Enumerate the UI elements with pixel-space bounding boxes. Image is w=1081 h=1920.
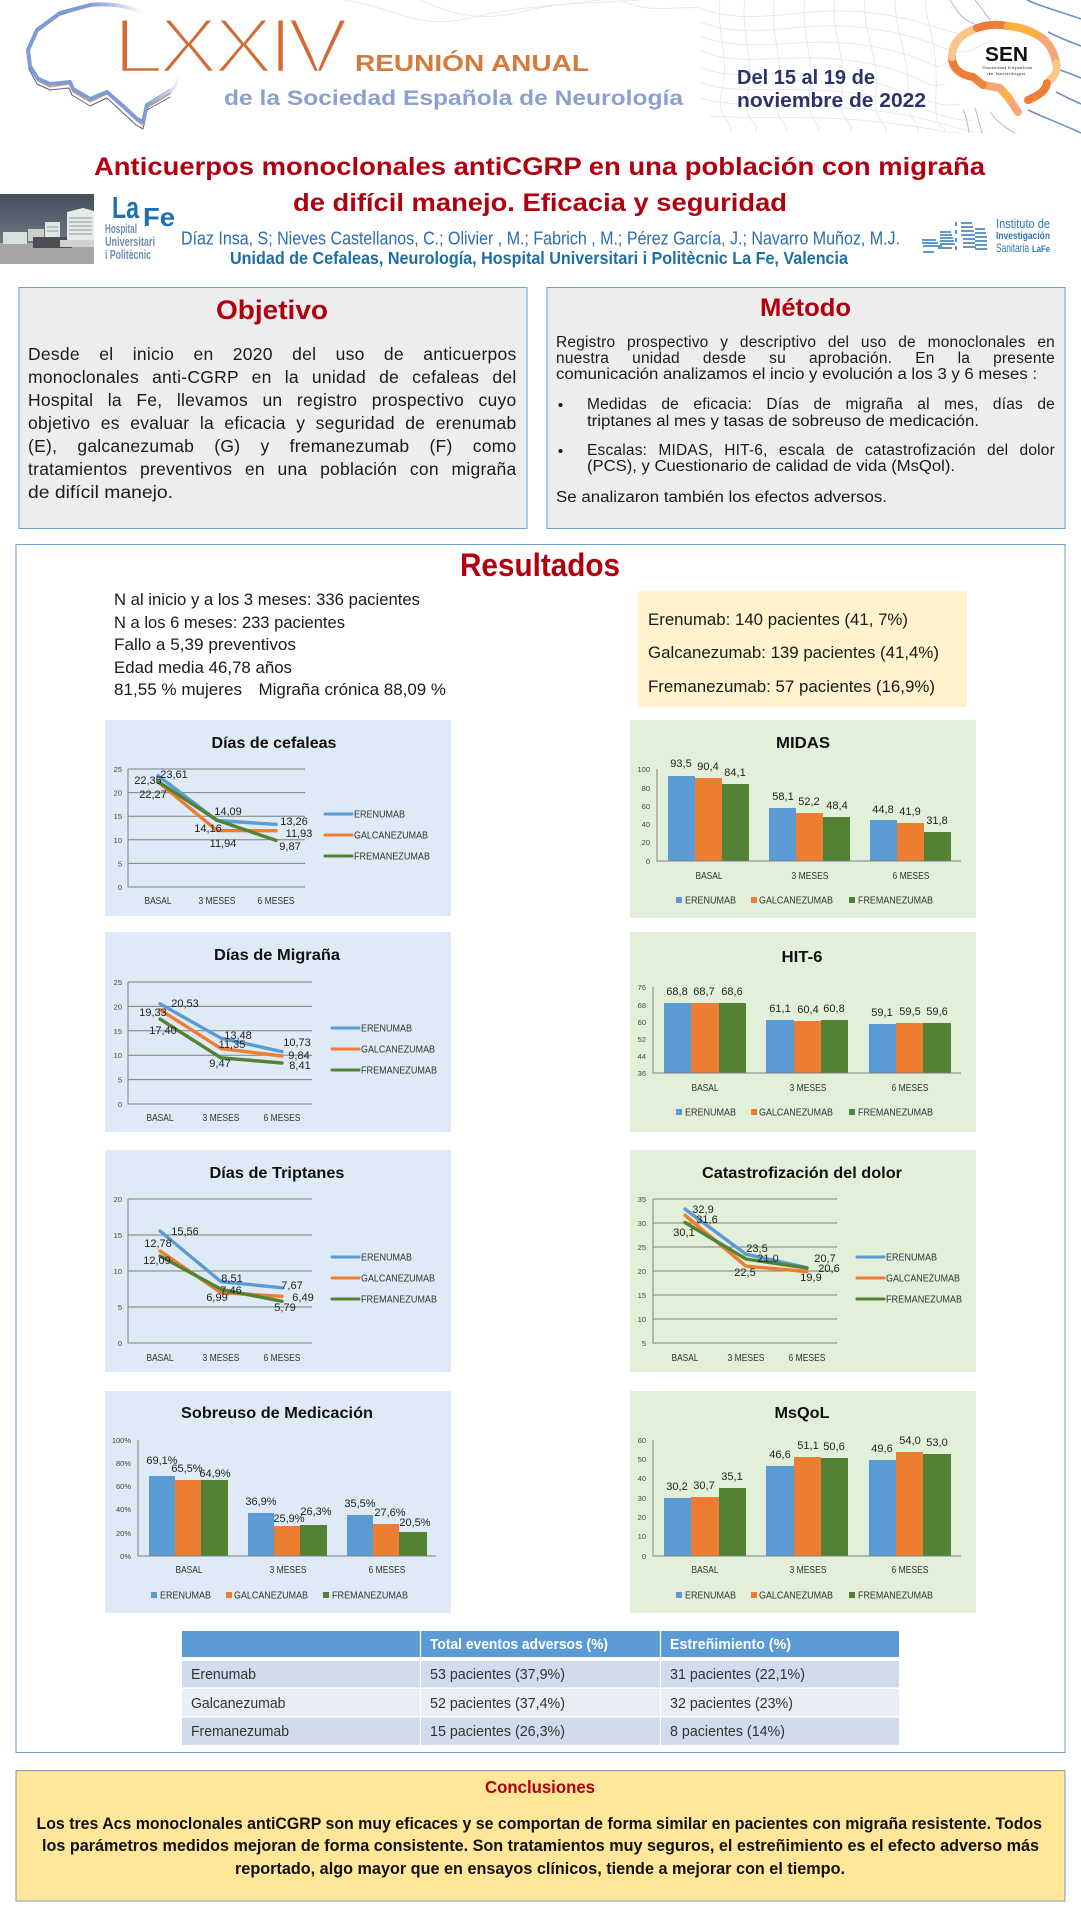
line chart: catastrofizacion del dolor: 22,5 (734, 1267, 756, 1279)
heading: Sociedad Espanola de Neurologia: de la Sociedad Española de Neurología (224, 87, 683, 110)
bar chart: MIDAS: 31,8 (926, 815, 948, 827)
bar chart: sobreuso de medicacion: 69,1% (146, 1455, 178, 1467)
table header: Total eventos adversos (%) (430, 1636, 608, 1653)
adverse effects note: Se analizaron también los efectos adversos. (556, 489, 887, 506)
legend: ERENUMAB (361, 1024, 412, 1034)
title: de difícil manejo. Eficacia y seguridad (293, 189, 787, 217)
legend (676, 1590, 933, 1602)
bar chart: MIDAS: 41,9 (899, 806, 921, 818)
line chart: dias de cefaleas: 5 (118, 859, 122, 868)
method intro (556, 335, 1055, 383)
bar chart: MsQoL: 30,2 (666, 1481, 688, 1493)
line chart: dias de cefaleas: 20 (114, 789, 122, 798)
line chart: catastrofizacion del dolor: 19,9 (800, 1272, 822, 1284)
panel: resultados (16, 544, 1065, 1752)
legend (332, 1024, 437, 1076)
bar chart: HIT-6: 6 MESES (892, 1083, 929, 1094)
legend: FREMANEZUMAB (858, 896, 933, 906)
line chart: dias de triptanes (105, 1150, 451, 1372)
row: Galcanezumab (191, 1695, 793, 1712)
logo: La Fe hospital: Hospital (105, 221, 137, 236)
row: Fremanezumab: 8 pacientes (14%) (670, 1723, 785, 1740)
line chart: dias de migrana: 15 (114, 1027, 122, 1036)
bar chart: MsQoL: 35,1 (721, 1471, 743, 1483)
bar chart: sobreuso de medicacion: 80% (116, 1459, 131, 1468)
conclusions text: reportado, algo mayor que en ensayos clínicos, tiende a mejorar con el tiempo. (235, 1859, 845, 1878)
conclusions text: los parámetros medidos mejoran de forma consistente. Son tratamientos muy seguros, el estreñimiento es el efecto adverso más (42, 1836, 1039, 1855)
legend: FREMANEZUMAB (886, 1294, 962, 1306)
bar chart: sobreuso de medicacion: 26,3% (300, 1506, 332, 1518)
bar chart: sobreuso de medicacion: 20% (116, 1529, 131, 1538)
line chart: dias de cefaleas: 13,26 (280, 816, 308, 828)
bar chart: HIT-6: 60 (638, 1018, 646, 1027)
row: Erenumab: Erenumab (191, 1666, 256, 1683)
bar chart: MIDAS: 6 MESES (892, 871, 930, 882)
header banner (27, 0, 1081, 133)
bar chart: sobreuso de medicacion: 60% (116, 1482, 131, 1491)
bar chart: MIDAS: 20 (642, 838, 650, 847)
line chart: dias de triptanes: 12,09 (143, 1255, 171, 1267)
bar chart: MsQoL: 51,1 (797, 1440, 819, 1452)
chart title: Días de Triptanes (210, 1165, 345, 1182)
line chart: catastrofizacion del dolor: 23,5 (746, 1243, 768, 1255)
bar chart: HIT-6: 76 (638, 983, 646, 992)
heading: Reunion Anual: REUNIÓN ANUAL (355, 49, 589, 76)
bar chart: HIT-6: 68,8 (666, 986, 688, 998)
bar chart: sobreuso de medicacion: 64,9% (199, 1468, 231, 1480)
row: Galcanezumab: Galcanezumab (191, 1695, 286, 1712)
bar chart: MIDAS: BASAL (696, 871, 723, 882)
bar chart: HIT-6: 44 (638, 1052, 646, 1061)
line chart: catastrofizacion del dolor: 20 (638, 1267, 646, 1276)
row: Galcanezumab: 52 pacientes (37,4%) (430, 1695, 565, 1712)
line chart: dias de triptanes: BASAL (146, 1353, 174, 1364)
line chart: dias de triptanes: 6 MESES (264, 1353, 301, 1364)
row: Fremanezumab: Fremanezumab (191, 1723, 289, 1740)
bar chart: MsQoL: 50 (638, 1455, 646, 1464)
method intro: nuestra unidad desde su aprobación. En la presente (556, 350, 1055, 367)
bar chart: MIDAS: 90,4 (697, 761, 719, 773)
legend: FREMANEZUMAB (858, 1590, 933, 1602)
line chart: dias de triptanes: 15,56 (171, 1226, 199, 1238)
legend: ERENUMAB (886, 1252, 937, 1264)
bar chart: sobreuso de medicacion: 0% (120, 1552, 131, 1561)
patient stats: 81,55 % mujeres (114, 681, 242, 699)
line chart: dias de migrana: 17,40 (149, 1025, 177, 1037)
patient stats (114, 591, 446, 699)
icon: brain outline (27, 4, 178, 129)
bar chart: sobreuso de medicacion: 36,9% (245, 1496, 277, 1508)
bar chart: MsQoL: 53,0 (926, 1437, 948, 1449)
bar chart: MIDAS (630, 720, 976, 918)
bar chart: sobreuso de medicacion: 65,5% (171, 1463, 203, 1475)
legend: FREMANEZUMAB (858, 1108, 933, 1118)
bar chart: HIT-6: 59,5 (899, 1006, 921, 1018)
legend (676, 1108, 933, 1118)
objective paragraph: Hospital la Fe, llevamos un registro prospectivo cuyo (28, 390, 516, 410)
row: Erenumab: 53 pacientes (37,9%) (430, 1666, 565, 1683)
line chart: dias de migrana: 10,73 (283, 1037, 311, 1049)
bar chart: MIDAS: 84,1 (724, 767, 746, 779)
legend: GALCANEZUMAB (886, 1274, 960, 1284)
objective paragraph: objetivo es evaluar la eficacia y seguridad de erenumab (28, 413, 516, 433)
bar chart: MIDAS: 3 MESES (792, 871, 829, 882)
bar chart: HIT-6: 59,6 (926, 1006, 948, 1018)
bar chart: MsQoL: 6 MESES (892, 1565, 929, 1576)
row: Fremanezumab (191, 1723, 785, 1740)
line chart: catastrofizacion del dolor: 32,9 (692, 1204, 714, 1216)
legend (325, 810, 430, 862)
bar chart: sobreuso de medicacion: 100% (112, 1436, 131, 1445)
line chart: dias de migrana: 20,53 (171, 998, 199, 1010)
bar chart: sobreuso de medicacion: 6 MESES (368, 1565, 406, 1576)
line chart: dias de cefaleas: 10 (114, 836, 122, 845)
line chart: dias de triptanes: 3 MESES (202, 1353, 240, 1364)
patient stats: Edad media 46,78 años (114, 659, 292, 677)
line chart: dias de cefaleas: 3 MESES (198, 896, 236, 907)
bar chart: MIDAS: 100 (637, 765, 650, 774)
heading: resultados: Resultados (460, 547, 620, 583)
bar chart: MsQoL: 10 (638, 1532, 646, 1541)
legend: ERENUMAB (361, 1252, 412, 1264)
event dates (737, 67, 926, 112)
bar chart: MsQoL: 30 (638, 1494, 646, 1503)
row: Fremanezumab: 15 pacientes (26,3%) (430, 1723, 565, 1740)
line chart: dias de migrana: 25 (114, 978, 122, 987)
method intro: comunicación analizamos el incio y evolución a los 3 y 6 meses : (556, 366, 1037, 383)
chart title: HIT-6 (782, 949, 823, 966)
bar chart: MsQoL: 0 (642, 1552, 646, 1561)
logo: La Fe hospital: i Politècnic (105, 247, 151, 262)
table header (430, 1636, 791, 1653)
line chart: catastrofizacion del dolor: 5 (642, 1339, 646, 1348)
legend: FREMANEZUMAB (354, 852, 430, 862)
line chart: dias de cefaleas: 9,87 (279, 841, 301, 853)
row: Galcanezumab: 32 pacientes (23%) (670, 1695, 793, 1712)
legend (857, 1252, 962, 1306)
bar chart: sobreuso de medicacion: 3 MESES (270, 1565, 307, 1576)
legend: ERENUMAB (160, 1590, 211, 1602)
patient stats: N a los 6 meses: 233 pacientes (114, 614, 345, 632)
logo: La Fe hospital: Universitari (105, 234, 155, 249)
event dates: Del 15 al 19 de (737, 67, 875, 89)
line chart: dias de cefaleas: 23,61 (160, 769, 188, 781)
banner wave background (345, 0, 1081, 133)
line chart: dias de triptanes: 7,46 (220, 1285, 242, 1297)
line chart: dias de triptanes: 12,78 (144, 1238, 172, 1250)
panel: objetivo (19, 288, 527, 528)
line chart: dias de migrana: 3 MESES (202, 1113, 240, 1124)
line chart: catastrofizacion del dolor: 35 (638, 1195, 646, 1204)
bar chart: MIDAS: 0 (646, 857, 650, 866)
bar chart: sobreuso de medicacion: 25,9% (273, 1513, 305, 1525)
bar chart: MIDAS: 60 (642, 802, 650, 811)
line chart: dias de migrana: 20 (114, 1002, 122, 1011)
line chart: catastrofizacion del dolor: 6 MESES (788, 1353, 826, 1364)
bar chart: MsQoL: 50,6 (823, 1441, 845, 1453)
chart title: MsQoL (774, 1405, 830, 1422)
conclusions text (36, 1814, 1042, 1878)
logo: SEN: de Neurología (987, 71, 1026, 76)
heading: objetivo: Objetivo (216, 295, 328, 325)
bar chart: MsQoL: BASAL (692, 1565, 719, 1576)
objective paragraph: monoclonales anti-CGRP en la unidad de cefaleas del (28, 367, 516, 387)
legend: GALCANEZUMAB (759, 1590, 833, 1602)
bar chart: sobreuso de medicacion: 40% (116, 1505, 131, 1514)
bar chart: sobreuso de medicacion: 20,5% (399, 1517, 431, 1529)
logo: Instituto de Investigacion Sanitaria: Investigación (996, 230, 1050, 242)
bar chart: HIT-6: 61,1 (769, 1003, 791, 1015)
line chart: dias de cefaleas: 6 MESES (258, 896, 295, 907)
line chart: dias de migrana: 9,84 (288, 1050, 310, 1062)
panel: metodo (547, 288, 1065, 528)
bar chart: MIDAS: 93,5 (670, 758, 692, 770)
bar chart: MIDAS: 80 (642, 784, 650, 793)
callout: patients per drug: Erenumab: 140 pacientes (41, 7%) (648, 611, 908, 629)
panel: conclusiones (16, 1770, 1065, 1901)
bar chart: MsQoL: 3 MESES (790, 1565, 827, 1576)
bar chart: MIDAS: 52,2 (798, 796, 820, 808)
bar chart: MIDAS: 44,8 (872, 804, 894, 816)
line chart: dias de cefaleas: 22,35 (134, 775, 162, 787)
line chart: catastrofizacion del dolor: 21,0 (757, 1253, 779, 1265)
chart title: Sobreuso de Medicación (181, 1405, 373, 1422)
line chart: dias de triptanes: 8,51 (221, 1273, 243, 1285)
line chart: dias de migrana: 9,47 (209, 1058, 231, 1070)
bar chart: MsQoL: 54,0 (899, 1435, 921, 1447)
bar chart: sobreuso de medicacion: 27,6% (374, 1507, 406, 1519)
legend: GALCANEZUMAB (354, 830, 428, 842)
line chart: dias de cefaleas: 14,16 (194, 823, 222, 835)
logo: Instituto de Investigacion Sanitaria: Sanitaria (996, 241, 1029, 255)
legend: ERENUMAB (685, 896, 736, 906)
line chart: dias de triptanes: 6,49 (292, 1292, 314, 1304)
line chart: dias de migrana: 6 MESES (264, 1113, 301, 1124)
authors: Díaz Insa, S; Nieves Castellanos, C.; Olivier , M.; Fabrich , M.; Pérez García, J.; Navarro Muñoz, M.J. (181, 228, 900, 248)
legend: GALCANEZUMAB (759, 896, 833, 906)
line chart: dias de cefaleas: BASAL (144, 896, 172, 907)
line chart: dias de cefaleas: 11,94 (210, 838, 236, 850)
logo: La Fe hospital: Fe (143, 202, 175, 232)
bar chart: MsQoL: 20 (638, 1513, 646, 1522)
line chart: dias de migrana: 10 (114, 1051, 122, 1060)
bar chart: MsQoL (630, 1391, 976, 1613)
line chart: dias de cefaleas: 14,09 (214, 806, 242, 818)
logo: SEN (952, 25, 1057, 112)
bullet: medidas de eficacia (558, 397, 1055, 430)
row: Erenumab: 31 pacientes (22,1%) (670, 1666, 805, 1683)
bar chart: MsQoL: 46,6 (769, 1449, 791, 1461)
bar chart: sobreuso de medicacion (105, 1391, 451, 1613)
callout: patients per drug (638, 591, 967, 707)
legend: GALCANEZUMAB (361, 1044, 435, 1056)
heading: metodo: Método (760, 294, 851, 322)
bar chart: HIT-6: 68 (638, 1001, 646, 1010)
affiliation: Unidad de Cefaleas, Neurología, Hospital Universitari i Politècnic La Fe, Valencia (230, 248, 848, 268)
line chart: catastrofizacion del dolor: 30,1 (673, 1227, 695, 1239)
table header: Estreñimiento (%) (670, 1636, 791, 1653)
logo: Instituto de Investigacion Sanitaria (922, 217, 1050, 255)
bar chart: MIDAS: 48,4 (826, 800, 848, 812)
hospital photo (0, 194, 94, 264)
legend (151, 1590, 408, 1602)
line chart: dias de migrana: 11,35 (219, 1039, 245, 1051)
legend: FREMANEZUMAB (361, 1066, 437, 1076)
line chart: dias de cefaleas: 11,93 (286, 828, 312, 840)
logo: La Fe hospital (105, 190, 175, 262)
line chart: dias de triptanes: 7,67 (281, 1280, 303, 1292)
bar chart: sobreuso de medicacion: 35,5% (344, 1498, 376, 1510)
callout: patients per drug: Galcanezumab: 139 pacientes (41,4%) (648, 644, 939, 662)
bar chart: MsQoL: 60 (638, 1436, 646, 1445)
bar chart: HIT-6: 68,7 (693, 986, 715, 998)
table: adverse events (182, 1631, 899, 1745)
bar chart: MIDAS: 40 (642, 820, 650, 829)
objective paragraph (28, 343, 516, 502)
line chart: dias de migrana: 0 (118, 1100, 122, 1109)
bar chart: sobreuso de medicacion: BASAL (176, 1565, 203, 1576)
line chart: dias de triptanes: 15 (114, 1231, 122, 1240)
objective paragraph: tratamientos preventivos en una población con migraña (28, 459, 516, 479)
bar chart: MsQoL: 40 (638, 1474, 646, 1483)
logo: Instituto de Investigacion Sanitaria: LaFe (1032, 244, 1050, 254)
line chart: dias de cefaleas: 22,27 (139, 789, 167, 801)
bar chart: HIT-6 (630, 932, 976, 1132)
callout: patients per drug: Fremanezumab: 57 pacientes (16,9%) (648, 678, 935, 696)
line chart: catastrofizacion del dolor: 10 (638, 1315, 646, 1324)
legend: GALCANEZUMAB (361, 1274, 435, 1284)
legend: ERENUMAB (685, 1590, 736, 1602)
logo: Instituto de Investigacion Sanitaria: Instituto de (996, 217, 1050, 231)
bar chart: MsQoL: 49,6 (871, 1443, 893, 1455)
patient stats: N al inicio y a los 3 meses: 336 pacientes (114, 591, 420, 609)
bar chart: HIT-6: BASAL (692, 1083, 719, 1094)
line chart: dias de migrana: BASAL (146, 1113, 174, 1124)
legend: FREMANEZUMAB (361, 1294, 437, 1306)
line chart: catastrofizacion del dolor (630, 1150, 976, 1372)
chart title: MIDAS (776, 735, 830, 752)
bar chart: HIT-6: 60,4 (797, 1004, 819, 1016)
line chart: dias de migrana: 19,33 (139, 1007, 167, 1019)
line chart: dias de cefaleas: 25 (114, 765, 122, 774)
chart title: Días de cefaleas (212, 735, 337, 752)
bar chart: HIT-6: 3 MESES (790, 1083, 827, 1094)
line chart: dias de migrana (105, 932, 451, 1132)
event dates: noviembre de 2022 (737, 90, 926, 112)
bar chart: MsQoL: 30,7 (693, 1480, 715, 1492)
title (94, 153, 986, 217)
conclusions text: Los tres Acs monoclonales antiCGRP son muy eficaces y se comportan de forma similar en pacientes con migraña resistente. Todos (36, 1814, 1042, 1833)
line chart: catastrofizacion del dolor: 30 (638, 1219, 646, 1228)
bar chart: HIT-6: 68,6 (721, 986, 743, 998)
legend (676, 896, 933, 906)
line chart: dias de migrana: 8,41 (289, 1060, 311, 1072)
legend: GALCANEZUMAB (234, 1590, 308, 1602)
bar chart: MIDAS: 58,1 (772, 791, 794, 803)
line chart: dias de triptanes: 5 (118, 1303, 122, 1312)
chart title: Catastrofización del dolor (702, 1165, 902, 1182)
objective paragraph: (E), galcanezumab (G) y fremanezumab (F) como (28, 436, 516, 456)
line chart: dias de triptanes: 6,99 (206, 1292, 228, 1304)
line chart: catastrofizacion del dolor: 25 (638, 1243, 646, 1252)
logo: La Fe hospital: La (112, 190, 140, 225)
line chart: catastrofizacion del dolor: 15 (638, 1291, 646, 1300)
event number LXXIV: LXXIV (113, 2, 349, 89)
bar chart: HIT-6: 60,8 (823, 1003, 845, 1015)
line chart: dias de migrana: 5 (118, 1076, 122, 1085)
legend: ERENUMAB (685, 1108, 736, 1118)
line chart: dias de cefaleas (105, 720, 451, 916)
bullet: medidas de eficacia: triptanes al mes y tasas de sobreuso de medicación. (587, 413, 979, 430)
row: Erenumab (191, 1666, 805, 1683)
line chart: dias de cefaleas: 15 (114, 812, 122, 821)
objective paragraph: de difícil manejo. (28, 482, 173, 502)
bar chart: HIT-6: 52 (638, 1035, 646, 1044)
line chart: catastrofizacion del dolor: 3 MESES (728, 1353, 765, 1364)
bullet: escalas (558, 443, 1055, 475)
bar chart: HIT-6: 59,1 (871, 1007, 893, 1019)
logo: SEN: SEN (985, 44, 1028, 66)
legend: FREMANEZUMAB (332, 1590, 408, 1602)
patient stats: Fallo a 5,39 preventivos (114, 636, 296, 654)
logo: SEN: Sociedad Española (982, 65, 1033, 70)
line chart: catastrofizacion del dolor: BASAL (672, 1353, 699, 1364)
legend: ERENUMAB (354, 810, 405, 820)
line chart: dias de cefaleas: 0 (118, 883, 122, 892)
line chart: catastrofizacion del dolor: 20,6 (818, 1263, 840, 1275)
bullet: escalas: (PCS), y Cuestionario de calidad de vida (MsQol). (587, 458, 955, 475)
line chart: dias de triptanes: 5,79 (274, 1302, 296, 1314)
legend (332, 1252, 437, 1306)
line chart: dias de triptanes: 0 (118, 1339, 122, 1348)
line chart: catastrofizacion del dolor: 20,7 (814, 1253, 836, 1265)
line chart: dias de triptanes: 20 (114, 1195, 122, 1204)
line chart: dias de triptanes: 10 (114, 1267, 122, 1276)
legend: GALCANEZUMAB (759, 1108, 833, 1118)
title: Anticuerpos monoclonales antiCGRP en una población con migraña (94, 153, 986, 181)
heading: conclusiones: Conclusiones (485, 1777, 595, 1797)
line chart: dias de migrana: 13,48 (224, 1030, 252, 1042)
chart title: Días de Migraña (214, 947, 340, 964)
patient stats: Migraña crónica 88,09 % (258, 681, 446, 699)
line chart: catastrofizacion del dolor: 31,6 (696, 1214, 718, 1226)
bar chart: HIT-6: 36 (638, 1069, 646, 1078)
objective paragraph: Desde el inicio en 2020 del uso de anticuerpos (28, 344, 516, 364)
